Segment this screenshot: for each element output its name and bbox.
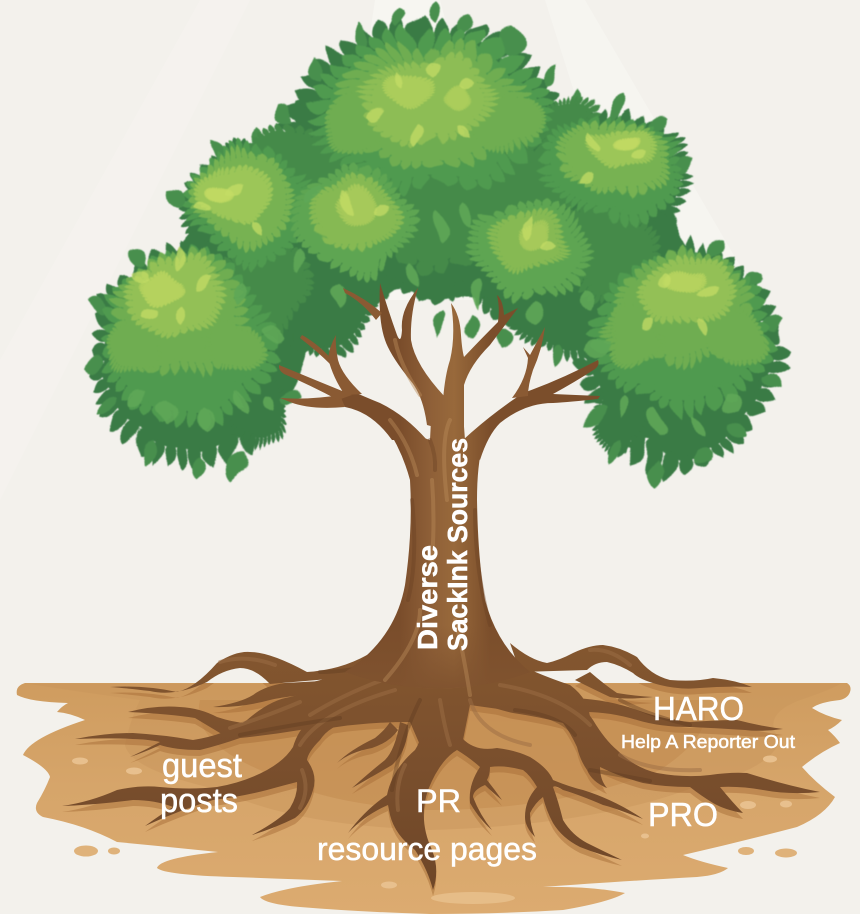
light leaves (130, 55, 719, 344)
label: PR: PR (416, 783, 461, 819)
middle fill (208, 94, 662, 342)
label: Diverse: Diverse (412, 545, 443, 650)
label: PRO: PRO (648, 796, 718, 833)
label: Help A Reporter Out: Help A Reporter Out (621, 732, 795, 752)
mid-tone leaves (129, 187, 746, 439)
upper-left cluster (184, 145, 320, 265)
leaf edge (80, 1, 787, 482)
right cluster (594, 241, 770, 413)
centre-left cluster (291, 168, 419, 276)
tree roots (62, 640, 820, 896)
trunk and branches (279, 283, 600, 695)
upper-right cluster (537, 114, 687, 222)
ground (17, 683, 851, 914)
centre-right cluster (468, 200, 592, 296)
foliage (80, 1, 793, 483)
trunk base blend (345, 600, 530, 688)
left cluster (100, 249, 276, 428)
top cluster (305, 29, 555, 195)
label: guest: guest (162, 747, 243, 785)
canopy fill (105, 40, 745, 450)
label: posts: posts (160, 782, 238, 820)
label: HARO: HARO (653, 690, 744, 727)
dark leafy base (81, 20, 793, 483)
label: SackInk Sources: SackInk Sources (442, 438, 473, 651)
label: resource pages: resource pages (317, 831, 537, 867)
